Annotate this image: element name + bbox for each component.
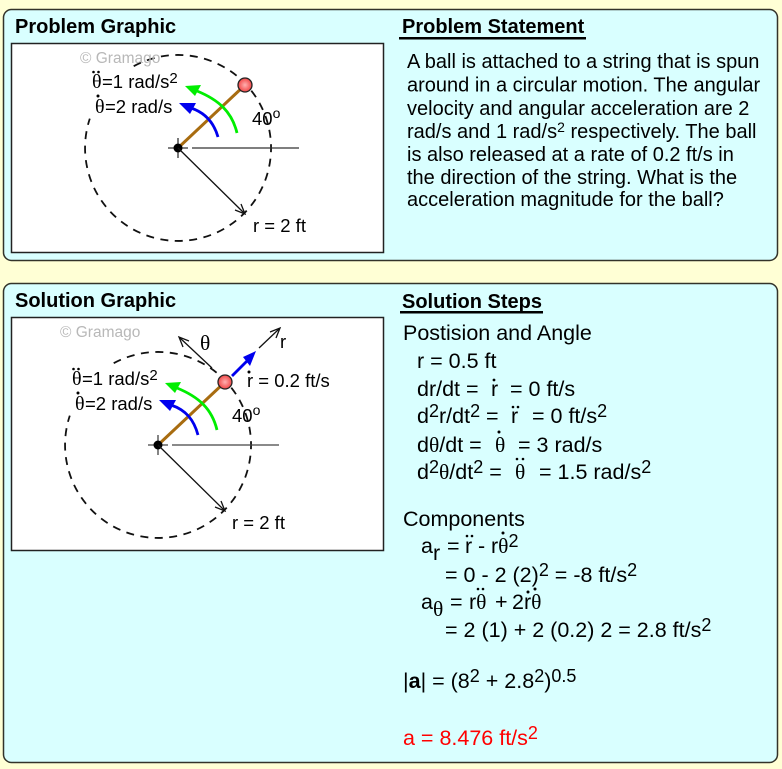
label: radius: r = 2 ft	[232, 512, 285, 533]
label: radial velocity: r = 0.2 ft/s	[247, 370, 330, 391]
label: angular acceleration: 2	[149, 367, 158, 384]
problem statement text: velocity and angular acceleration are 2	[407, 98, 749, 120]
steps: position and angle	[403, 321, 651, 484]
steps: components: Components	[403, 507, 525, 531]
answer: 2	[528, 723, 538, 743]
steps: position and angle: r/dt	[439, 404, 470, 428]
steps: position and angle: = 3 rad/s	[518, 433, 602, 457]
steps: position and angle: d	[417, 460, 429, 484]
label: angle: o	[273, 105, 281, 121]
steps: components: 2	[539, 560, 549, 580]
steps: position and angle: dr/dt =	[417, 377, 479, 401]
steps: position and angle: 2	[597, 401, 607, 421]
steps: components: r	[433, 541, 440, 565]
steps: components: rθ	[469, 590, 486, 614]
panel: problem	[4, 10, 778, 260]
problem statement text: A ball is attached to a string that is spun	[407, 51, 759, 73]
steps: position and angle: θ	[515, 460, 525, 484]
steps: components: =	[450, 590, 463, 614]
heading: problem statement: Problem Statement	[402, 16, 585, 38]
label: radius: r = 2 ft	[253, 215, 306, 236]
label: angular velocity: =2 rad/s	[105, 96, 172, 117]
problem statement text: respectively. The ball	[565, 121, 756, 143]
label: angular velocity: =2 rad/s	[85, 393, 152, 414]
reference line	[168, 138, 299, 158]
pivot	[154, 440, 162, 450]
steps: components: 2	[508, 531, 518, 551]
problem statement text: acceleration magnitude for the ball?	[407, 189, 724, 211]
steps: position and angle: 2	[473, 457, 483, 477]
steps: components: 2	[701, 615, 711, 635]
ball	[218, 375, 232, 389]
diagram: solution graphic	[12, 318, 384, 550]
steps: position and angle: r = 0.5 ft	[417, 349, 496, 373]
steps: components	[403, 507, 711, 642]
steps: position and angle: =	[480, 404, 499, 428]
arrow: radial velocity	[232, 351, 256, 376]
label: angle: 40	[252, 108, 273, 129]
steps: components: = -8 ft/s	[549, 563, 627, 587]
steps: position and angle: /dt	[449, 460, 473, 484]
problem statement text: around in a circular motion. The angular	[407, 74, 761, 96]
steps: components: 2rθ	[512, 590, 541, 614]
steps: components: -	[478, 534, 485, 558]
string	[178, 85, 245, 148]
problem statement text: the direction of the string. What is the	[407, 167, 737, 189]
problem statement text: rad/s and 1 rad/s	[407, 121, 557, 143]
arrow: angular acceleration	[165, 382, 217, 430]
steps: components: +	[495, 590, 508, 614]
label: angular acceleration: =1 rad/s	[102, 71, 169, 92]
steps: magnitude: 2	[534, 666, 544, 686]
arrow: r direction	[259, 328, 280, 348]
label: angular velocity: θ	[75, 393, 85, 415]
problem statement text	[407, 51, 761, 211]
steps: position and angle: dθ/dt =	[417, 433, 482, 457]
steps: magnitude: + 2.8	[480, 669, 534, 693]
steps: magnitude: )	[544, 669, 551, 693]
steps: components: a	[421, 590, 433, 614]
steps: position and angle: θ	[495, 433, 505, 457]
pivot	[174, 144, 182, 152]
label: theta: θ	[200, 331, 210, 355]
ball	[238, 78, 252, 92]
arrow: angular velocity	[159, 400, 198, 435]
steps: position and angle: 2	[641, 457, 651, 477]
steps: magnitude: 0.5	[551, 666, 576, 686]
steps: components: θ	[433, 597, 443, 621]
steps: position and angle: r	[491, 377, 498, 401]
label: angular acceleration: θ	[92, 71, 102, 93]
answer: a = 8.476 ft/s	[403, 726, 528, 750]
steps: position and angle: r	[511, 404, 518, 428]
dashed circular path	[65, 352, 251, 538]
steps: components: a	[421, 534, 433, 558]
reference line	[148, 435, 279, 455]
steps: position and angle: =	[483, 460, 502, 484]
steps: components: rθ	[491, 534, 508, 558]
steps: position and angle: 2	[470, 401, 480, 421]
steps: position and angle: = 1.5 rad/s	[539, 460, 641, 484]
arrow: theta direction	[179, 337, 212, 368]
label: angular velocity: θ	[95, 96, 105, 118]
label: r: r	[280, 331, 286, 352]
steps: components: = 0 - 2 (2)	[445, 563, 539, 587]
steps: magnitude: |a| = (8	[403, 669, 470, 693]
steps: position and angle: 2	[429, 401, 439, 421]
steps: position and angle: d	[417, 404, 429, 428]
steps: components: r	[465, 534, 472, 558]
label: angular acceleration: θ	[72, 368, 82, 390]
label: angle: 40	[232, 405, 253, 426]
steps: components: 2	[627, 560, 637, 580]
label: angular acceleration: =1 rad/s	[82, 368, 149, 389]
heading: problem graphic: Problem Graphic	[15, 16, 176, 38]
arrow: angular velocity	[179, 103, 218, 137]
diagram: problem graphic	[12, 44, 384, 252]
steps: components: =	[447, 534, 460, 558]
label: angular acceleration: 2	[169, 70, 178, 87]
steps: position and angle: = 0 ft/s	[532, 404, 597, 428]
steps: position and angle: 2	[429, 457, 439, 477]
problem statement text: is also released at a rate of 0.2 ft/s in	[407, 144, 734, 166]
label: angle: o	[253, 402, 261, 418]
heading: solution graphic: Solution Graphic	[15, 290, 176, 312]
steps: position and angle: = 0 ft/s	[510, 377, 575, 401]
heading: solution steps: Solution Steps	[402, 291, 542, 313]
steps: position and angle: Postision and Angle	[403, 321, 592, 345]
arrow: radius	[158, 445, 225, 511]
problem statement text: 2	[557, 119, 565, 135]
watermark: © Gramago	[60, 324, 140, 341]
panel: solution	[4, 284, 778, 762]
watermark: © Gramago	[80, 50, 160, 67]
steps: position and angle: θ	[439, 460, 449, 484]
arrow: angular acceleration	[185, 85, 237, 133]
string	[158, 382, 225, 445]
steps: components: = 2 (1) + 2 (0.2) 2 = 2.8 ft/s	[445, 618, 701, 642]
dashed circular path	[85, 55, 271, 241]
arrow: radius	[178, 148, 245, 214]
steps: magnitude: 2	[470, 666, 480, 686]
